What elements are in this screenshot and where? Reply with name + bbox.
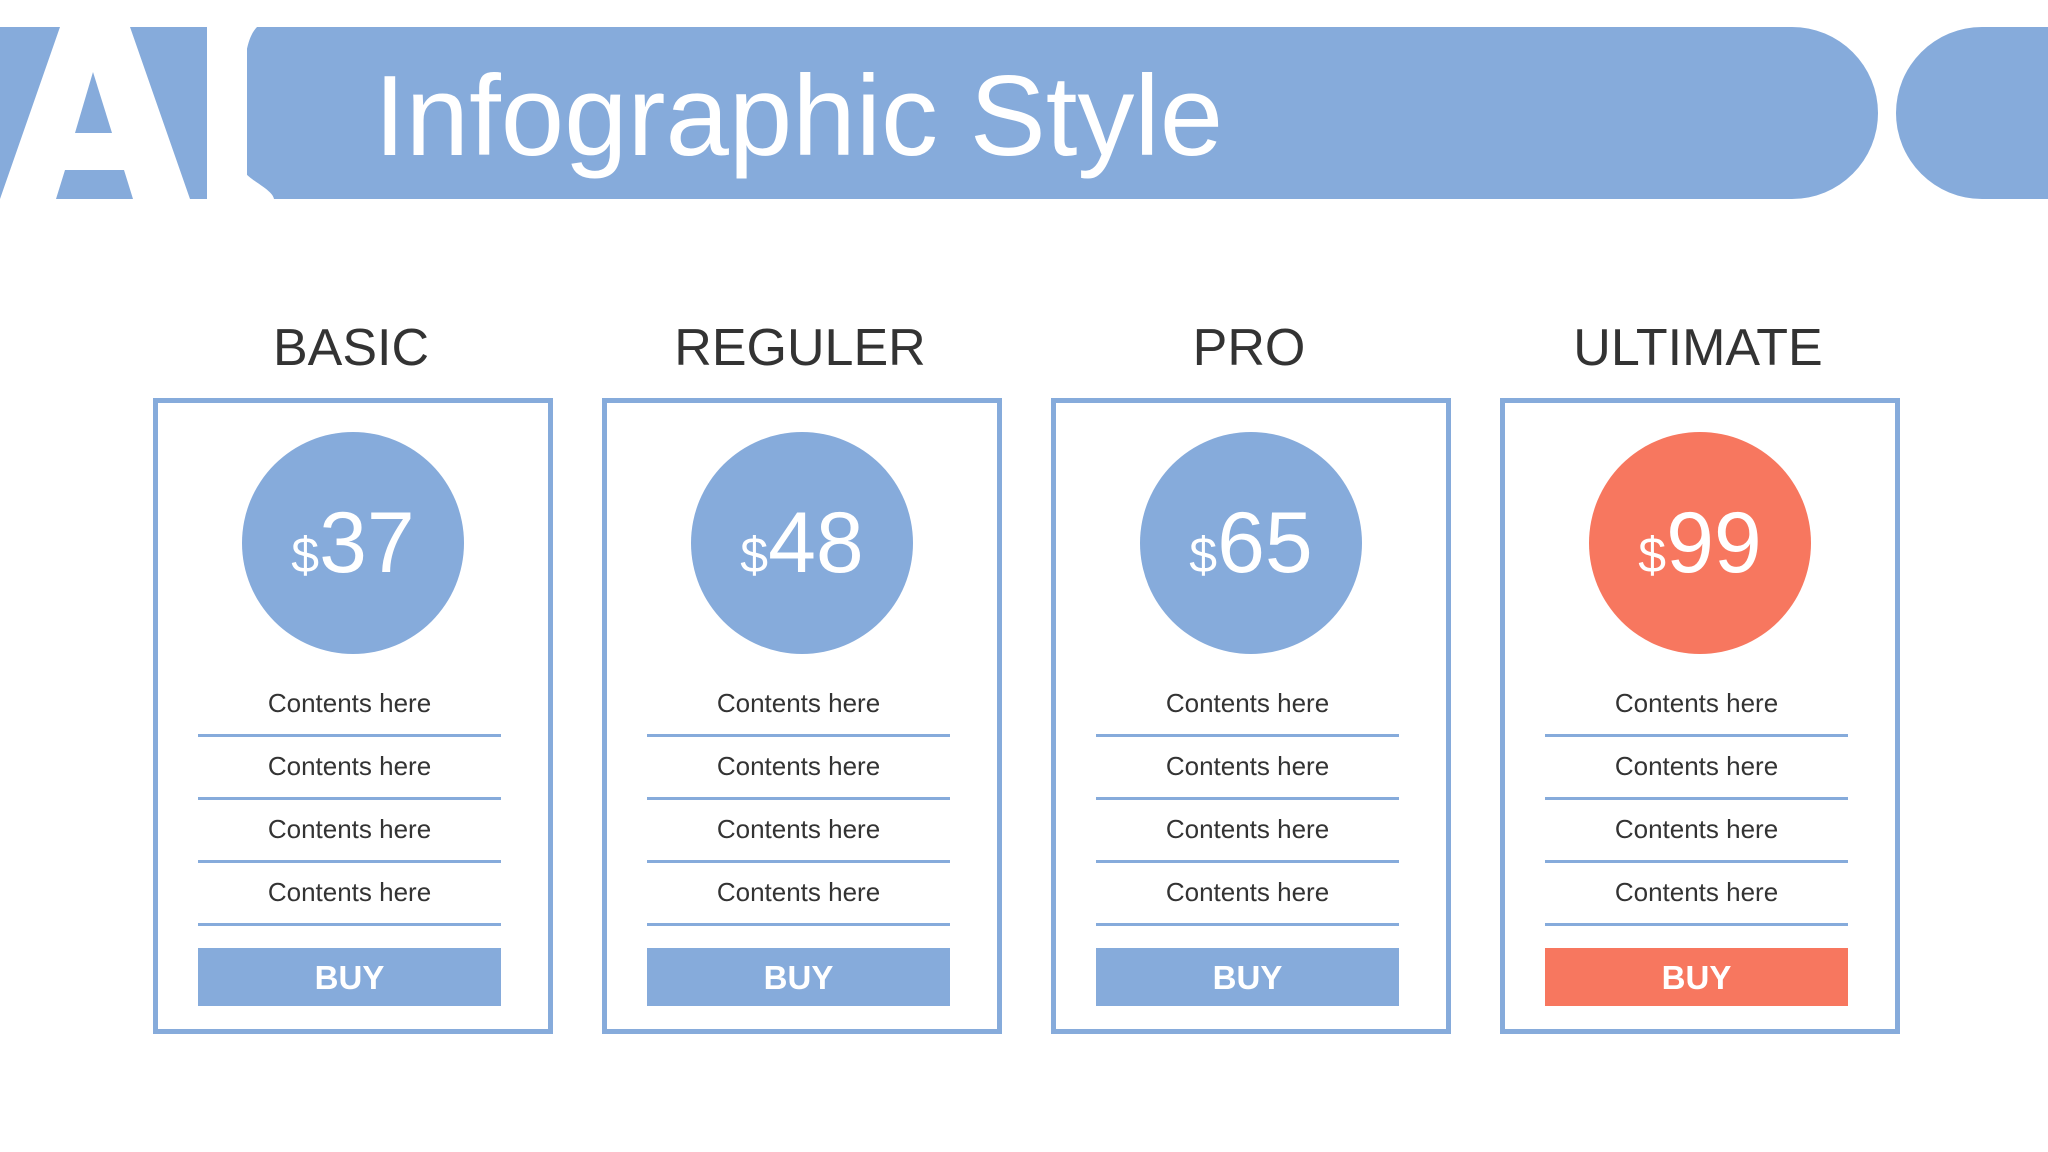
panel: pro: $65 bbox=[1189, 495, 1313, 591]
panel: basic: Contents here bbox=[268, 877, 431, 907]
panel: pro: BUY bbox=[1213, 959, 1282, 996]
panel: basic: Contents here bbox=[268, 751, 431, 781]
panel: pro bbox=[1051, 398, 1451, 1034]
panel: reguler: BUY bbox=[764, 959, 833, 996]
panel: basic: Contents here bbox=[268, 814, 431, 844]
header banner bbox=[0, 27, 1878, 199]
panel: ultimate: $99 bbox=[1638, 495, 1762, 591]
header right pill bbox=[1896, 27, 2048, 199]
panel: pro: Contents here bbox=[1166, 688, 1329, 718]
panel: reguler: $48 bbox=[740, 495, 864, 591]
panel: basic: $37 bbox=[291, 495, 415, 591]
panel: ultimate: Contents here bbox=[1615, 814, 1778, 844]
panel: reguler: Contents here bbox=[717, 688, 880, 718]
heading: REGULER: REGULER bbox=[674, 319, 926, 377]
heading: ULTIMATE: ULTIMATE bbox=[1573, 319, 1823, 377]
panel: ultimate: Contents here bbox=[1615, 688, 1778, 718]
panel: ultimate: Contents here bbox=[1615, 751, 1778, 781]
panel: ultimate bbox=[1500, 398, 1900, 1034]
heading: PRO: PRO bbox=[1193, 319, 1305, 377]
panel: pro: Contents here bbox=[1166, 751, 1329, 781]
panel: reguler: Contents here bbox=[717, 751, 880, 781]
panel: ultimate: Contents here bbox=[1615, 877, 1778, 907]
panel: reguler: Contents here bbox=[717, 814, 880, 844]
panel: pro: Contents here bbox=[1166, 814, 1329, 844]
heading: BASIC: BASIC bbox=[273, 319, 429, 377]
panel: basic: BUY bbox=[315, 959, 384, 996]
panel: pro: Contents here bbox=[1166, 877, 1329, 907]
panel: reguler bbox=[602, 398, 1002, 1034]
logo: AI with face bbox=[0, 27, 274, 199]
panel: basic bbox=[153, 398, 553, 1034]
panel: reguler: Contents here bbox=[717, 877, 880, 907]
title: Infographic Style bbox=[374, 53, 1223, 180]
panel: basic: Contents here bbox=[268, 688, 431, 718]
panel: ultimate: BUY bbox=[1662, 959, 1731, 996]
